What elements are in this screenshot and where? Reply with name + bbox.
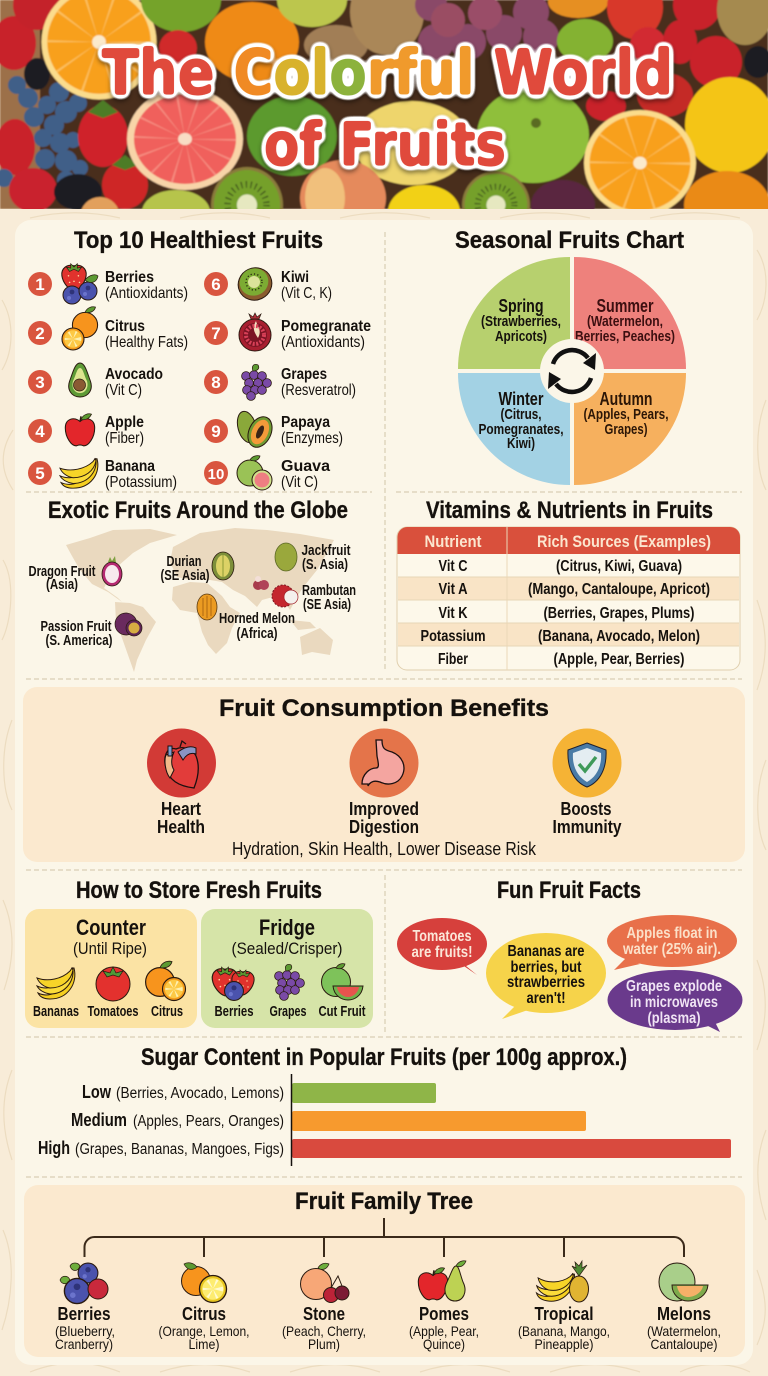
speech bubble: grapes: (plasma) xyxy=(648,1010,700,1027)
list item 1: berries: 1 xyxy=(35,275,45,294)
label: rambutan: Rambutan xyxy=(302,582,356,599)
label: heart health: Heart xyxy=(161,799,201,819)
segment: winter: (Citrus, xyxy=(500,406,542,423)
list item 8: grapes: Grapes xyxy=(281,366,327,383)
panel: fruit consumption benefits xyxy=(23,687,745,862)
family: stone: (Peach, Cherry, xyxy=(282,1323,366,1339)
icon: citrus xyxy=(146,961,186,1000)
table header xyxy=(424,532,711,551)
label: durian: Durian xyxy=(166,553,202,570)
labels: fridge fruits: Cut Fruit xyxy=(318,1004,366,1020)
family: melons xyxy=(647,1263,721,1352)
card: counter xyxy=(25,909,197,1028)
segment: winter: Pomegranates, xyxy=(478,421,564,438)
panel: seasonal fruits chart xyxy=(455,227,686,485)
segment: spring: Spring xyxy=(498,296,544,316)
heading: exotic: Exotic Fruits Around the Globe xyxy=(48,497,348,524)
family: melons: (Watermelon, xyxy=(647,1323,721,1339)
heading: store: How to Store Fresh Fruits xyxy=(76,877,322,904)
list item 9: papaya xyxy=(204,409,343,451)
label: improved digestion: Digestion xyxy=(349,817,419,837)
list item 5: banana xyxy=(28,458,177,491)
icon: small lychee xyxy=(253,576,269,590)
label: dragon fruit: (Asia) xyxy=(46,576,78,593)
label: passion fruit: (S. America) xyxy=(46,632,112,649)
title: The Colorful World xyxy=(102,36,673,109)
family: tropical: Tropical xyxy=(534,1304,594,1324)
row label: low: (Berries, Avocado, Lemons) xyxy=(116,1085,284,1102)
segment: winter: Winter xyxy=(498,389,544,409)
list item 10: guava xyxy=(204,456,330,491)
list item 8: grapes xyxy=(204,364,356,400)
row label: low xyxy=(82,1082,284,1102)
list item 4: apple: (Fiber) xyxy=(105,430,144,447)
segment: autumn: (Apples, Pears, xyxy=(584,406,668,423)
heading: sugar: Sugar Content in Popular Fruits (per 100g approx.) xyxy=(141,1044,627,1071)
panel: top 10 healthiest fruits xyxy=(28,227,371,491)
list item 9: papaya: (Enzymes) xyxy=(281,430,343,447)
list item 7: pomegranate: 7 xyxy=(211,324,221,343)
row label: high: (Grapes, Bananas, Mangoes, Figs) xyxy=(75,1141,284,1158)
icon: cut fruit xyxy=(322,964,363,1000)
panel: fun fruit facts xyxy=(397,877,742,1032)
title xyxy=(102,36,673,180)
row label: medium xyxy=(71,1110,284,1130)
card: fridge: Fridge xyxy=(259,915,315,940)
segment: summer: Summer xyxy=(596,296,654,316)
family: berries: (Blueberry, xyxy=(55,1323,115,1339)
label: durian: (SE Asia) xyxy=(160,567,210,584)
nutrient table xyxy=(397,527,740,670)
icon: berries xyxy=(212,967,254,1000)
list item 6: kiwi xyxy=(204,262,332,306)
family: pomes: Pomes xyxy=(419,1304,469,1324)
title: of Fruits xyxy=(264,110,506,180)
label: improved digestion xyxy=(349,799,419,837)
card: counter: (Until Ripe) xyxy=(73,939,147,958)
hero banner: fruit photo collage xyxy=(0,0,768,209)
main cream panel xyxy=(15,220,753,1365)
heading: fun facts: Fun Fruit Facts xyxy=(497,877,641,904)
family: pomes: (Apple, Pear, xyxy=(409,1323,479,1339)
heading: benefits: Fruit Consumption Benefits xyxy=(219,695,549,722)
speech bubble: apples: Apples float in xyxy=(626,925,718,942)
label: horned melon: (Africa) xyxy=(236,625,278,642)
family: citrus: Lime) xyxy=(188,1336,220,1352)
list item 10: guava: Guava xyxy=(281,458,330,475)
icon: bananas xyxy=(37,968,75,999)
labels: fridge fruits xyxy=(214,1004,366,1020)
panel: exotic fruits map xyxy=(28,497,356,672)
family: berries: Berries xyxy=(58,1304,110,1324)
table rows: (Citrus, Kiwi, Guava) xyxy=(556,558,682,575)
list item 8: grapes: 8 xyxy=(211,373,221,392)
label: jackfruit: (S. Asia) xyxy=(302,556,348,573)
heading: family tree: Fruit Family Tree xyxy=(295,1188,473,1215)
list item 1: berries xyxy=(28,264,188,304)
list item 3: avocado xyxy=(28,363,163,399)
labels: counter fruits: Bananas xyxy=(33,1004,79,1020)
icon: heart health xyxy=(147,728,216,798)
panel: sugar content chart xyxy=(38,1044,731,1166)
speech bubble: grapes: in microwaves xyxy=(630,994,718,1011)
list item 2: citrus: 2 xyxy=(35,324,45,343)
speech bubble: bananas: aren't! xyxy=(526,990,566,1007)
family: citrus xyxy=(158,1263,250,1352)
list item 3: avocado: Avocado xyxy=(105,366,163,383)
list item 7: pomegranate xyxy=(204,313,371,351)
segment: autumn: Autumn xyxy=(600,389,652,409)
table rows: (Mango, Cantaloupe, Apricot) xyxy=(528,581,710,598)
family: melons: Cantaloupe) xyxy=(650,1336,718,1352)
list item 7: pomegranate: Pomegranate xyxy=(281,318,371,335)
speech bubble: apples: water (25% air). xyxy=(622,941,721,958)
list item 6: kiwi: Kiwi xyxy=(281,269,309,286)
icon: tomato xyxy=(96,967,130,1001)
card: counter: Counter xyxy=(76,915,146,940)
labels: counter fruits: Citrus xyxy=(151,1004,183,1020)
row label: medium: (Apples, Pears, Oranges) xyxy=(133,1113,284,1130)
panel: fruit family tree xyxy=(24,1185,745,1357)
segment: summer: (Watermelon, xyxy=(587,313,663,330)
table rows: Vit C xyxy=(438,558,468,575)
table rows: (Berries, Grapes, Plums) xyxy=(544,605,694,622)
label: boosts immunity: Boosts xyxy=(560,799,612,819)
list item 3: avocado: (Vit C) xyxy=(105,382,142,399)
segment: spring xyxy=(481,296,561,345)
labels: fridge fruits: Grapes xyxy=(270,1004,306,1020)
segment: summer xyxy=(575,296,675,345)
family: berries xyxy=(55,1263,115,1352)
label: boosts immunity: Immunity xyxy=(552,817,622,837)
speech bubble: apples xyxy=(607,915,737,970)
label: improved digestion: Improved xyxy=(349,799,419,819)
list item 5: banana: 5 xyxy=(35,464,45,483)
pie chart: four seasons xyxy=(458,257,686,485)
row label: high xyxy=(38,1138,284,1158)
labels: counter fruits xyxy=(33,1004,183,1020)
heading: top 10: Top 10 Healthiest Fruits xyxy=(74,227,323,254)
labels: fridge fruits: Berries xyxy=(214,1004,254,1020)
label: horned melon xyxy=(197,594,295,642)
family: tropical: (Banana, Mango, xyxy=(518,1323,610,1339)
list item 2: citrus: Citrus xyxy=(105,318,145,335)
list item 10: guava: 10 xyxy=(208,466,224,483)
segment: spring: (Strawberries, xyxy=(481,313,561,330)
segment: autumn xyxy=(584,389,668,438)
world map xyxy=(66,528,334,672)
list item 4: apple: Apple xyxy=(105,414,144,431)
label: boosts immunity xyxy=(552,799,622,837)
label: rambutan: (SE Asia) xyxy=(303,596,351,613)
family: citrus: Citrus xyxy=(182,1304,226,1324)
speech bubble: bananas: berries, but xyxy=(510,959,582,976)
label: heart health: Health xyxy=(157,817,205,837)
list item 5: banana: (Potassium) xyxy=(105,474,177,491)
table rows: Vit A xyxy=(438,581,468,598)
label: jackfruit: Jackfruit xyxy=(302,542,351,559)
list item 1: berries: (Antioxidants) xyxy=(105,285,188,302)
icon: stomach xyxy=(350,728,418,798)
list item 1: berries: Berries xyxy=(105,269,154,286)
speech bubble: tomatoes: are fruits! xyxy=(412,944,472,961)
list item 8: grapes: (Resveratrol) xyxy=(281,382,356,399)
heading: seasonal: Seasonal Fruits Chart xyxy=(455,227,684,254)
family: citrus: (Orange, Lemon, xyxy=(158,1323,250,1339)
family: stone: Plum) xyxy=(308,1336,340,1352)
segment: summer: Berries, Peaches) xyxy=(575,328,675,345)
list item 5: banana: Banana xyxy=(105,458,155,475)
speech bubble: bananas: strawberries xyxy=(507,974,585,991)
speech bubble: bananas: Bananas are xyxy=(508,943,585,960)
family: berries: Cranberry) xyxy=(55,1336,113,1352)
family: pomes xyxy=(409,1261,479,1352)
speech bubble: grapes: Grapes explode xyxy=(626,978,722,995)
family: tropical xyxy=(518,1261,610,1352)
icon: shield xyxy=(552,728,622,798)
family: stone: Stone xyxy=(303,1304,345,1324)
list item 6: kiwi: (Vit C, K) xyxy=(281,285,332,302)
label: rambutan xyxy=(272,582,356,613)
panel: how to store fresh fruits xyxy=(25,877,373,1028)
label: horned melon: Horned Melon xyxy=(219,610,295,627)
text: other benefits: Hydration, Skin Health, Lower Disease Risk xyxy=(232,839,537,859)
table rows: Potassium xyxy=(420,628,486,645)
label: passion fruit: Passion Fruit xyxy=(40,618,112,635)
list item 6: kiwi: 6 xyxy=(211,275,221,294)
table rows xyxy=(420,558,710,668)
row label: high: High xyxy=(38,1138,70,1158)
list item 2: citrus: (Healthy Fats) xyxy=(105,334,188,351)
heading: vitamins: Vitamins & Nutrients in Fruits xyxy=(426,497,713,524)
list item 7: pomegranate: (Antioxidants) xyxy=(281,334,365,351)
table rows: (Apple, Pear, Berries) xyxy=(554,651,684,668)
row label: medium: Medium xyxy=(71,1110,127,1130)
speech bubble: tomatoes xyxy=(397,918,487,975)
table rows: (Banana, Avocado, Melon) xyxy=(538,628,700,645)
list item 3: avocado: 3 xyxy=(35,373,45,392)
bar chart xyxy=(38,1074,731,1166)
card: fridge xyxy=(201,909,373,1028)
icon: cycle arrows xyxy=(540,339,604,403)
label: heart health xyxy=(157,799,205,837)
table rows: Fiber xyxy=(438,651,468,668)
family: tropical: Pineapple) xyxy=(534,1336,594,1352)
labels: counter fruits: Tomatoes xyxy=(88,1004,138,1020)
family: stone xyxy=(282,1263,366,1352)
panel: vitamins and nutrients table xyxy=(397,497,740,670)
list item 2: citrus xyxy=(28,307,188,351)
segment: winter: Kiwi) xyxy=(507,435,535,452)
table header: Nutrient xyxy=(424,532,482,551)
label: dragon fruit: Dragon Fruit xyxy=(28,563,96,580)
label: dragon fruit xyxy=(28,556,122,593)
table rows: Vit K xyxy=(438,605,468,622)
label: passion fruit xyxy=(40,613,142,649)
row label: low: Low xyxy=(82,1082,112,1102)
family: pomes: Quince) xyxy=(423,1336,465,1352)
label: jackfruit xyxy=(275,542,351,573)
card: fridge: (Sealed/Crisper) xyxy=(232,939,342,958)
speech bubble: bananas xyxy=(486,933,606,1019)
list item 9: papaya: Papaya xyxy=(281,414,330,431)
segment: autumn: Grapes) xyxy=(604,421,648,438)
family: melons: Melons xyxy=(657,1304,711,1324)
tree connector lines xyxy=(84,1218,684,1257)
speech bubble: tomatoes: Tomatoes xyxy=(412,928,472,945)
list item 4: apple: 4 xyxy=(35,422,45,441)
list item 9: papaya: 9 xyxy=(211,422,221,441)
list item 4: apple xyxy=(28,414,144,447)
label: durian xyxy=(160,552,234,584)
table header: Rich Sources (Examples) xyxy=(537,532,711,551)
icon: grapes xyxy=(275,964,304,1000)
segment: winter xyxy=(478,389,564,452)
speech bubble: grapes xyxy=(608,970,742,1032)
segment: spring: Apricots) xyxy=(495,328,547,345)
list item 10: guava: (Vit C) xyxy=(281,474,318,491)
